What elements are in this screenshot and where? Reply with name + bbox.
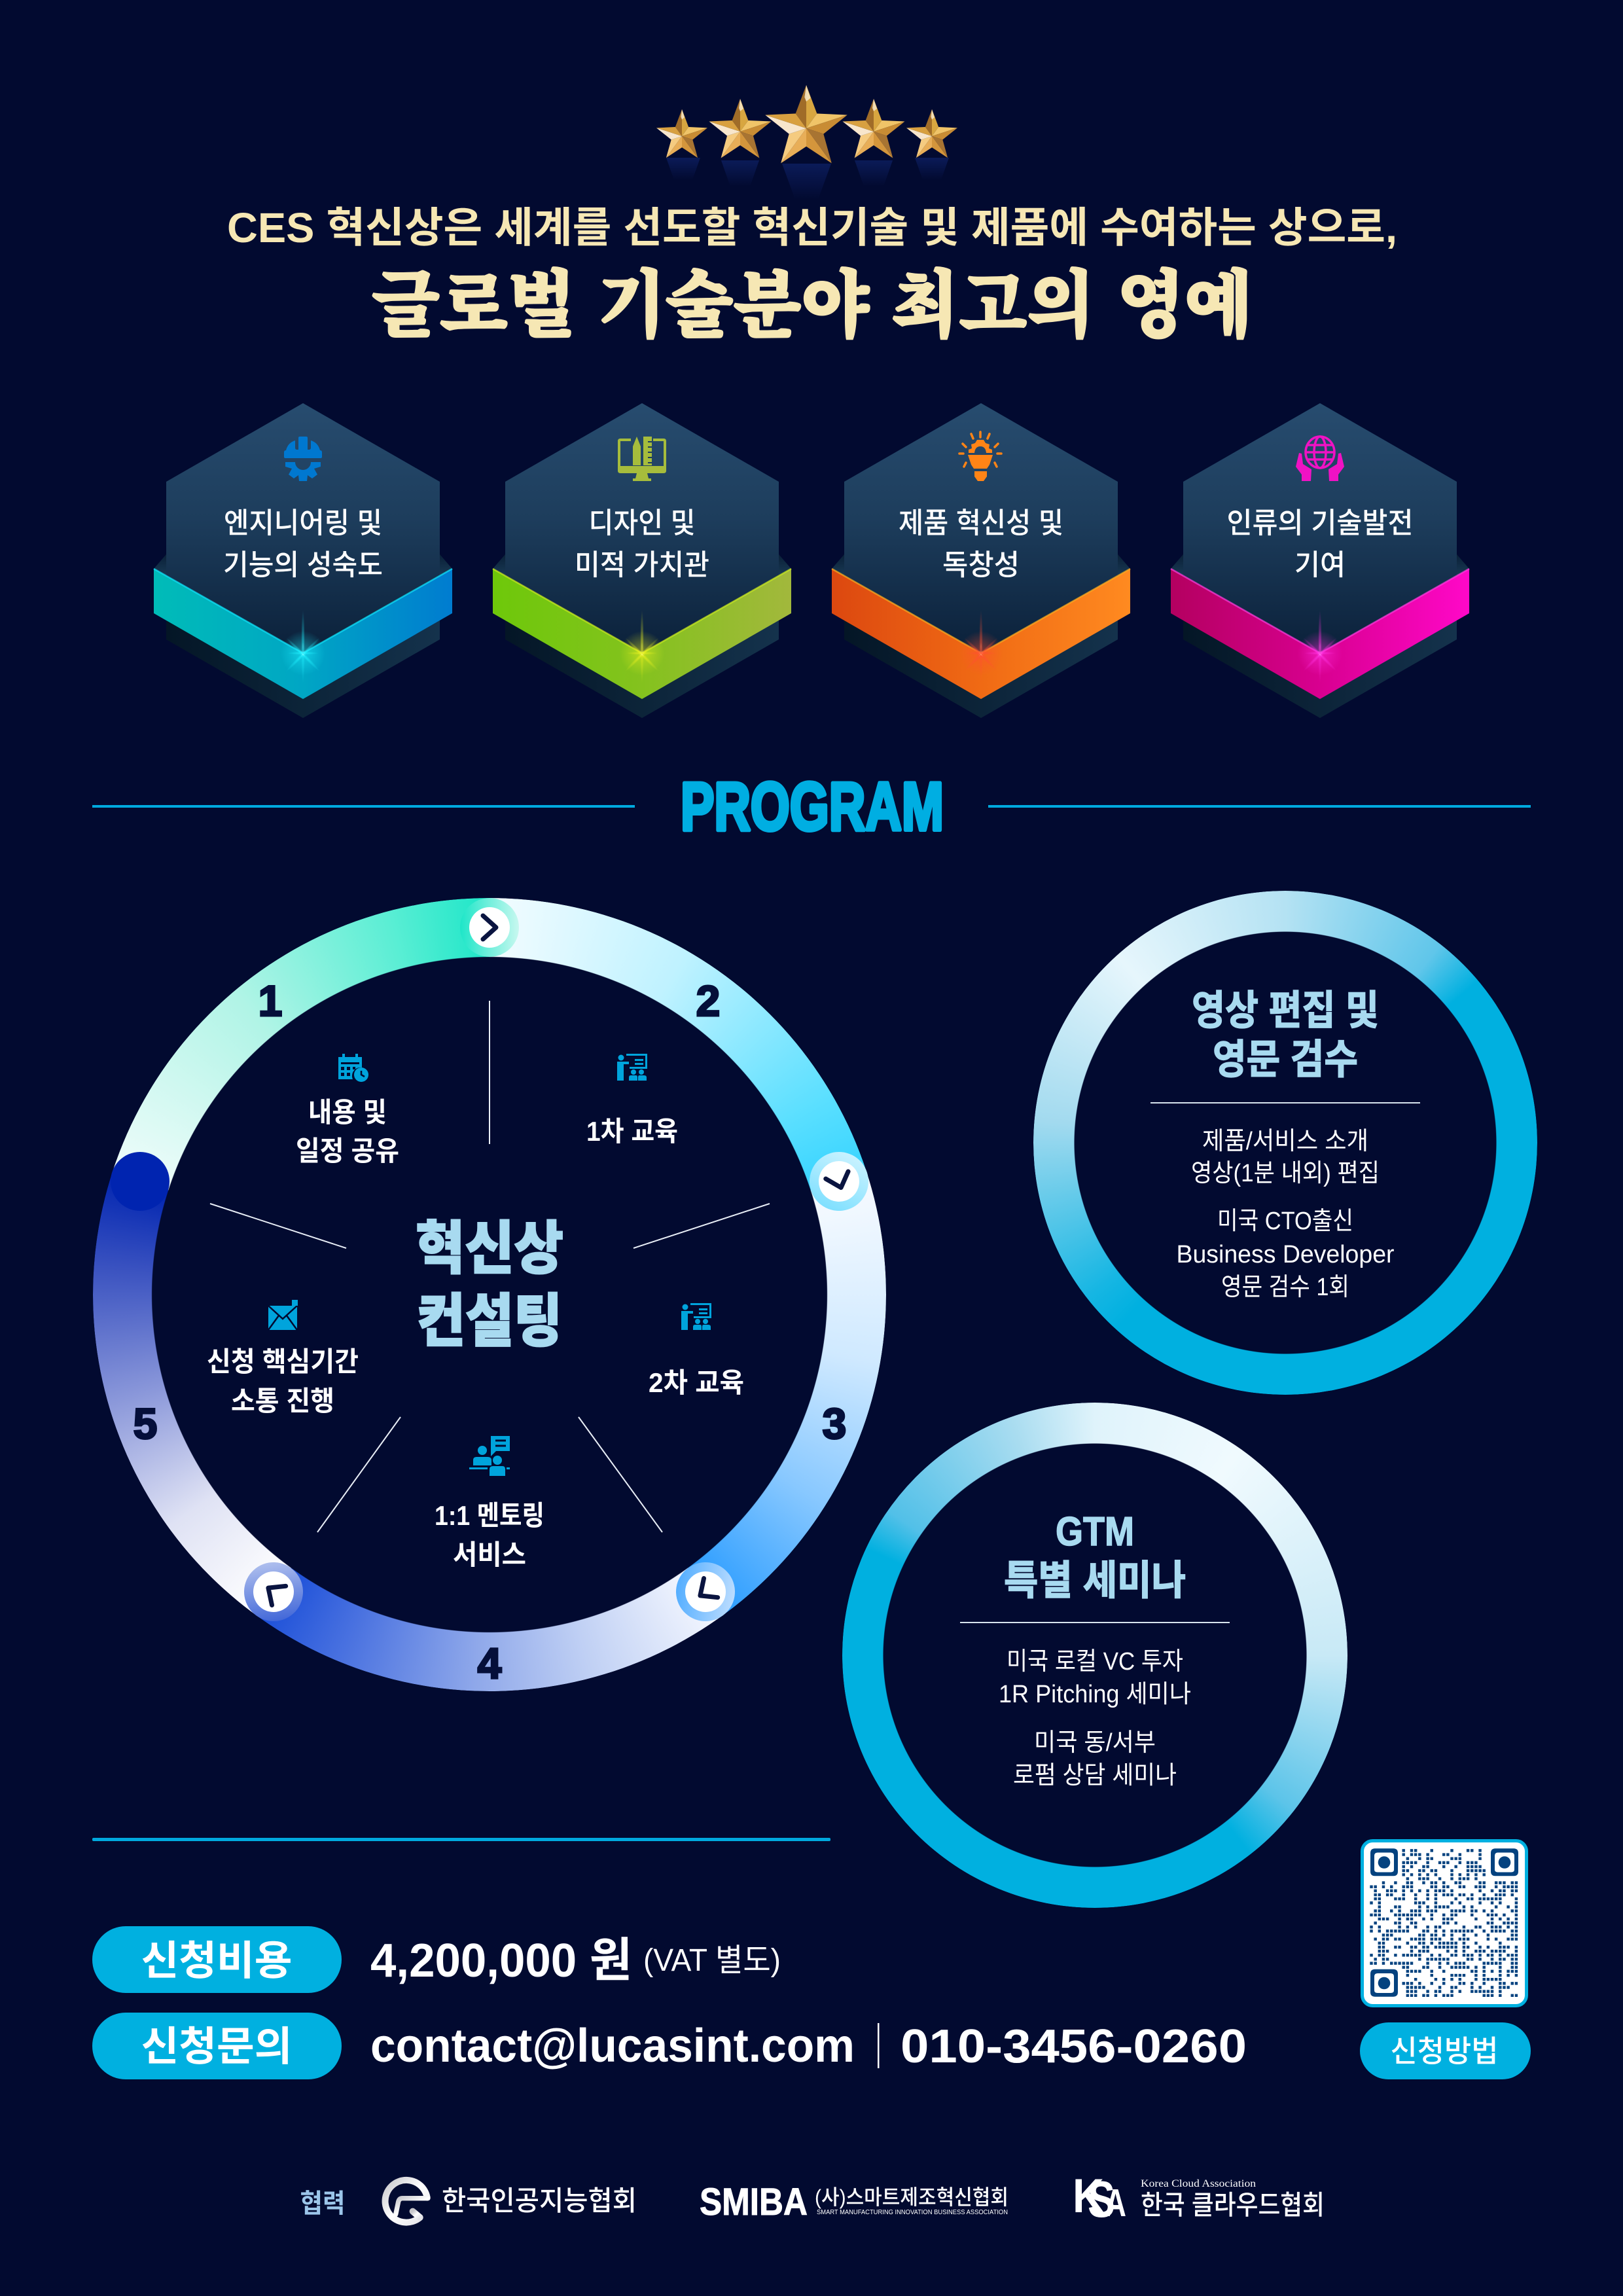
logo: Korea AI Association bbox=[385, 2180, 637, 2223]
icon: mentoring bbox=[469, 1436, 510, 1476]
logo: Korea Cloud Association: 한국 클라우드협회 bbox=[1141, 2190, 1325, 2220]
fee row: 신청비용 bbox=[141, 1939, 292, 1984]
fee row: 4,200,000 원 bbox=[370, 1935, 632, 1987]
heading: PROGRAM: PROGRAM bbox=[681, 769, 944, 845]
step numbers: 1 bbox=[259, 977, 282, 1025]
panel text: GTM seminar: 미국 동/서부 bbox=[1034, 1729, 1156, 1757]
contact row: 010-3456-0260 bbox=[901, 2020, 1247, 2073]
step 5: communication bbox=[207, 1300, 359, 1416]
title: 글로벌 기술분야 최고의 영예 bbox=[372, 247, 1253, 352]
logo: Korea Cloud Association bbox=[1073, 2170, 1325, 2228]
heading: PROGRAM bbox=[92, 769, 1531, 845]
title: ring centre: 컨설팅 bbox=[417, 1289, 562, 1354]
text: engineering label bbox=[223, 507, 383, 581]
panel text: video editing: 영문 검수 1회 bbox=[1221, 1274, 1349, 1301]
panel: hexagon contribution bbox=[1171, 403, 1469, 718]
step numbers: 3 bbox=[823, 1399, 846, 1448]
fee row: (VAT 별도) bbox=[643, 1943, 781, 1978]
contact row: 신청문의 bbox=[141, 2024, 292, 2070]
text: engineering label: 엔지니어링 및 bbox=[224, 507, 382, 539]
panel text: video editing: 영문 검수 bbox=[1213, 1037, 1358, 1083]
text: innovation label: 제품 혁신성 및 bbox=[899, 507, 1063, 539]
contact row bbox=[92, 2013, 1247, 2079]
panel text: video editing: 영상 편집 및 bbox=[1192, 988, 1379, 1033]
icon: five gold stars bbox=[656, 85, 957, 200]
logo: SMIBA bbox=[700, 2181, 1008, 2223]
knob: step 3 arrow bbox=[664, 1551, 747, 1633]
logo: SMIBA: SMIBA bbox=[700, 2181, 808, 2223]
panel text: GTM seminar: 1R Pitching 세미나 bbox=[999, 1681, 1191, 1708]
button: how to apply: 신청방법 bbox=[1390, 2034, 1499, 2068]
icon: envelope bbox=[268, 1300, 298, 1330]
panel text: GTM seminar bbox=[960, 1509, 1230, 1789]
icon: light bulb with gear flame bbox=[959, 432, 1001, 481]
logo: Korea Cloud Association: S bbox=[1088, 2170, 1115, 2228]
step 4: mentoring: 1:1 멘토링 bbox=[435, 1500, 544, 1531]
panel text: GTM seminar: 특별 세미나 bbox=[1004, 1558, 1186, 1604]
step 1: schedule sharing: 내용 및 bbox=[308, 1097, 387, 1128]
text: contribution label bbox=[1226, 507, 1414, 581]
step 3: second training: 2차 교육 bbox=[649, 1367, 744, 1398]
step numbers: 2 bbox=[696, 977, 720, 1025]
chart: consulting cycle ring bbox=[93, 898, 886, 1691]
step 5: communication: 소통 진행 bbox=[231, 1386, 334, 1416]
icon: teacher bbox=[681, 1303, 711, 1330]
cycle ring end cap bbox=[111, 1152, 169, 1211]
logo: Korea AI Association: 한국인공지능협회 bbox=[442, 2185, 637, 2216]
panel: hexagon design bbox=[493, 403, 791, 718]
text: contribution label: 기여 bbox=[1294, 549, 1346, 581]
icon: calendar bbox=[338, 1054, 368, 1082]
panel text: video editing: 영상(1분 내외) 편집 bbox=[1191, 1160, 1380, 1187]
step 1: schedule sharing bbox=[296, 1054, 399, 1166]
panel text: GTM seminar: 미국 로컬 VC 투자 bbox=[1007, 1648, 1183, 1676]
icon: teacher bbox=[617, 1054, 647, 1081]
knob: step 4 arrow bbox=[232, 1551, 315, 1633]
logo: SMIBA: (사)스마트제조혁신협회 bbox=[815, 2185, 1008, 2209]
button: how to apply bbox=[1360, 2022, 1531, 2079]
panel text: GTM seminar: 로펌 상담 세미나 bbox=[1013, 1762, 1177, 1789]
step 5: communication: 신청 핵심기간 bbox=[207, 1346, 359, 1377]
text: innovation label: 독창성 bbox=[942, 549, 1020, 581]
fee row bbox=[92, 1926, 781, 1993]
text: contribution label: 인류의 기술발전 bbox=[1226, 507, 1414, 539]
logo: SMIBA: SMART MANUFACTURING INNOVATION BUSINESS ASSOCIATION bbox=[817, 2209, 1008, 2216]
text: design label: 디자인 및 bbox=[589, 507, 695, 539]
step numbers: 4 bbox=[478, 1639, 502, 1687]
text: innovation label bbox=[899, 507, 1063, 581]
step 3: second training bbox=[649, 1303, 744, 1398]
step 4: mentoring bbox=[435, 1436, 544, 1570]
icon: globe in hands bbox=[1296, 437, 1344, 481]
panel: hexagon innovation bbox=[832, 403, 1130, 718]
step numbers bbox=[134, 977, 846, 1687]
text: intro sentence: CES 혁신상은 세계를 선도할 혁신기술 및 제품에 수여하는 상으로, bbox=[227, 204, 1397, 251]
icon: helmet and gear bbox=[284, 437, 322, 481]
step 2: first training: 1차 교육 bbox=[586, 1116, 678, 1147]
panel text: video editing: 미국 CTO출신 bbox=[1217, 1208, 1353, 1235]
contact row: contact@lucasint.com bbox=[370, 2020, 855, 2072]
panel ring: video editing circle bbox=[1033, 891, 1537, 1395]
logo: Korea Cloud Association: A bbox=[1105, 2181, 1126, 2225]
text: engineering label: 기능의 성숙도 bbox=[223, 549, 383, 581]
title: ring centre: 혁신상 bbox=[416, 1216, 563, 1281]
step 2: first training bbox=[586, 1054, 678, 1147]
text: design label bbox=[575, 507, 709, 581]
knob: step 1 arrow bbox=[460, 898, 519, 957]
QR code bbox=[1363, 1840, 1526, 2005]
title: ring centre bbox=[416, 1216, 563, 1354]
knob: step 2 arrow bbox=[802, 1144, 876, 1219]
step 1: schedule sharing: 일정 공유 bbox=[296, 1136, 399, 1166]
panel text: video editing: 제품/서비스 소개 bbox=[1202, 1128, 1368, 1155]
panel text: GTM seminar: GTM bbox=[1056, 1509, 1134, 1554]
panel text: video editing bbox=[1150, 988, 1420, 1301]
text: design label: 미적 가치관 bbox=[575, 549, 709, 581]
panel ring: GTM seminar circle bbox=[842, 1403, 1347, 1908]
icon: monitor with ruler and pencil bbox=[618, 437, 666, 481]
panel: hexagon engineering bbox=[154, 403, 452, 718]
label: partners: 협력 bbox=[300, 2189, 346, 2218]
step 4: mentoring: 서비스 bbox=[453, 1539, 526, 1570]
logo: Korea Cloud Association: Korea Cloud Association bbox=[1141, 2178, 1256, 2189]
panel text: video editing: Business Developer bbox=[1177, 1241, 1395, 1268]
step numbers: 5 bbox=[134, 1399, 157, 1448]
logo: Korea Cloud Association: K bbox=[1073, 2170, 1104, 2223]
